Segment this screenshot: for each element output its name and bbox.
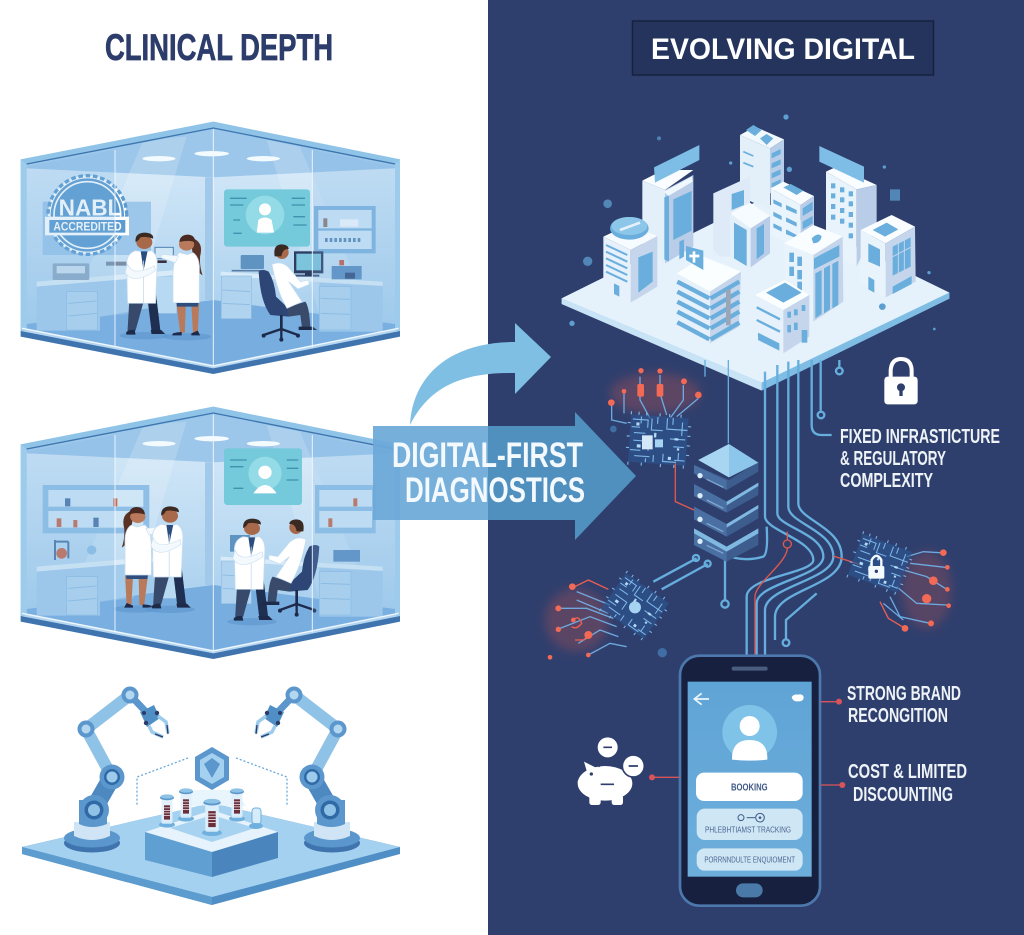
hexagon icon: [180, 747, 246, 806]
back tower: [740, 125, 784, 210]
label: cost and limited discounting: DISCOUNTING: [853, 784, 953, 806]
floating data dots: [569, 114, 936, 330]
central arrow: Digital-First Diagnostics: DIAGNOSTICS: [405, 471, 585, 510]
front small building: [755, 280, 809, 353]
tall building left: [642, 170, 693, 263]
red connection traces: [675, 463, 858, 655]
glowing chip lower left: [545, 569, 673, 660]
right tall building: [826, 167, 877, 267]
glowing chip top left: [608, 368, 702, 469]
tracking button: [697, 809, 803, 840]
title: Clinical Depth: CLINICAL DEPTH: [105, 27, 333, 68]
label: fixed infrastructure: [840, 426, 1000, 492]
laptop on right desk: [230, 535, 360, 562]
NABL accredited badge: ACCREDITED: [53, 220, 122, 234]
engagement button: [697, 848, 803, 871]
shelving right: [314, 206, 376, 253]
home button: [736, 883, 763, 897]
seated scientist: [259, 244, 317, 342]
phone screen: [688, 682, 812, 877]
equipment on right desk: [232, 255, 362, 279]
monitor: [294, 251, 323, 276]
right robot arm: [256, 686, 360, 852]
sample box: [145, 810, 278, 877]
scientist man: [120, 233, 169, 339]
label: cost and limited discounting: COST & LIMITED: [848, 761, 967, 783]
piggy bank icon: [577, 737, 644, 805]
engagement button: PORRNNDULTE ENQUIOMENT: [704, 855, 795, 864]
panel: robotic automation platform: [22, 686, 400, 905]
curved arrow: [410, 323, 551, 425]
scientist woman: [113, 507, 164, 613]
barcode sample tubes: [159, 788, 263, 836]
lab glassware on left desk: [55, 540, 96, 560]
server stack: [694, 444, 758, 562]
scientist man with tablet: [145, 506, 195, 613]
label: strong brand recognition: RECONGITION: [848, 705, 948, 727]
left white background panel: [0, 0, 488, 935]
lock icon: [884, 359, 918, 404]
far right building: [861, 215, 916, 297]
trunk lines to phone: [653, 360, 843, 655]
panel: glass lab with NABL badge: [21, 122, 400, 374]
dotted connector lines: [137, 758, 287, 805]
left rotunda building: [603, 217, 657, 303]
circuit network: [545, 359, 952, 660]
panel: smartphone app: [577, 656, 845, 906]
heading box: Evolving Digital: EVOLVING DIGITAL: [651, 33, 915, 66]
label: cost and limited discounting: [848, 761, 967, 806]
phone body: [680, 656, 820, 906]
mid right building: [784, 225, 843, 322]
shelves right: [315, 485, 376, 533]
cloud icon: [792, 694, 804, 701]
label: fixed infrastructure: & REGULATORY: [840, 448, 946, 470]
city base plate: [562, 200, 949, 391]
NABL accredited badge: [45, 176, 129, 254]
clipboard between scientists: [147, 247, 173, 262]
rooftop sign left: [654, 145, 699, 183]
equipment on left desk: [53, 262, 129, 280]
tracking button: PHLEBHTIAMST TRACKING: [705, 826, 791, 835]
rooftop sign right: [819, 146, 864, 183]
left robot arm: [64, 686, 168, 852]
red connectors: [650, 699, 845, 787]
platform: [22, 803, 400, 905]
booking button: BOOKING: [731, 782, 768, 793]
shelving left: [43, 202, 151, 255]
NABL accredited badge: NABL: [59, 194, 121, 220]
panel: glass lab with scientists: [21, 407, 400, 659]
shelves left with bottles: [43, 485, 149, 533]
label: strong brand recognition: [847, 683, 961, 727]
centre small building: [730, 203, 770, 267]
label: fixed infrastructure: COMPLEXITY: [840, 470, 933, 492]
glowing chip with lock right: [844, 530, 952, 632]
scientist woman: [160, 235, 211, 340]
avatar: [722, 705, 777, 761]
right navy background panel: [488, 0, 1024, 935]
seated scientist: [261, 519, 319, 617]
panel: isometric city platform: [562, 114, 949, 391]
label: strong brand recognition: STRONG BRAND: [847, 683, 961, 705]
back wall screen: [224, 189, 310, 247]
heading box: Evolving Digital: [632, 21, 934, 75]
phone speaker: [732, 667, 768, 671]
back wall screen: [224, 448, 302, 505]
central arrow: Digital-First Diagnostics: DIGITAL-FIRST: [392, 436, 583, 475]
mid slab building: [713, 177, 750, 257]
scientist standing: [227, 519, 277, 625]
hospital building with plus sign: [677, 246, 741, 343]
central arrow: Digital-First Diagnostics: [373, 412, 636, 540]
back right centre building: [771, 182, 814, 248]
back arrow: [694, 693, 709, 705]
booking button: [696, 773, 803, 801]
